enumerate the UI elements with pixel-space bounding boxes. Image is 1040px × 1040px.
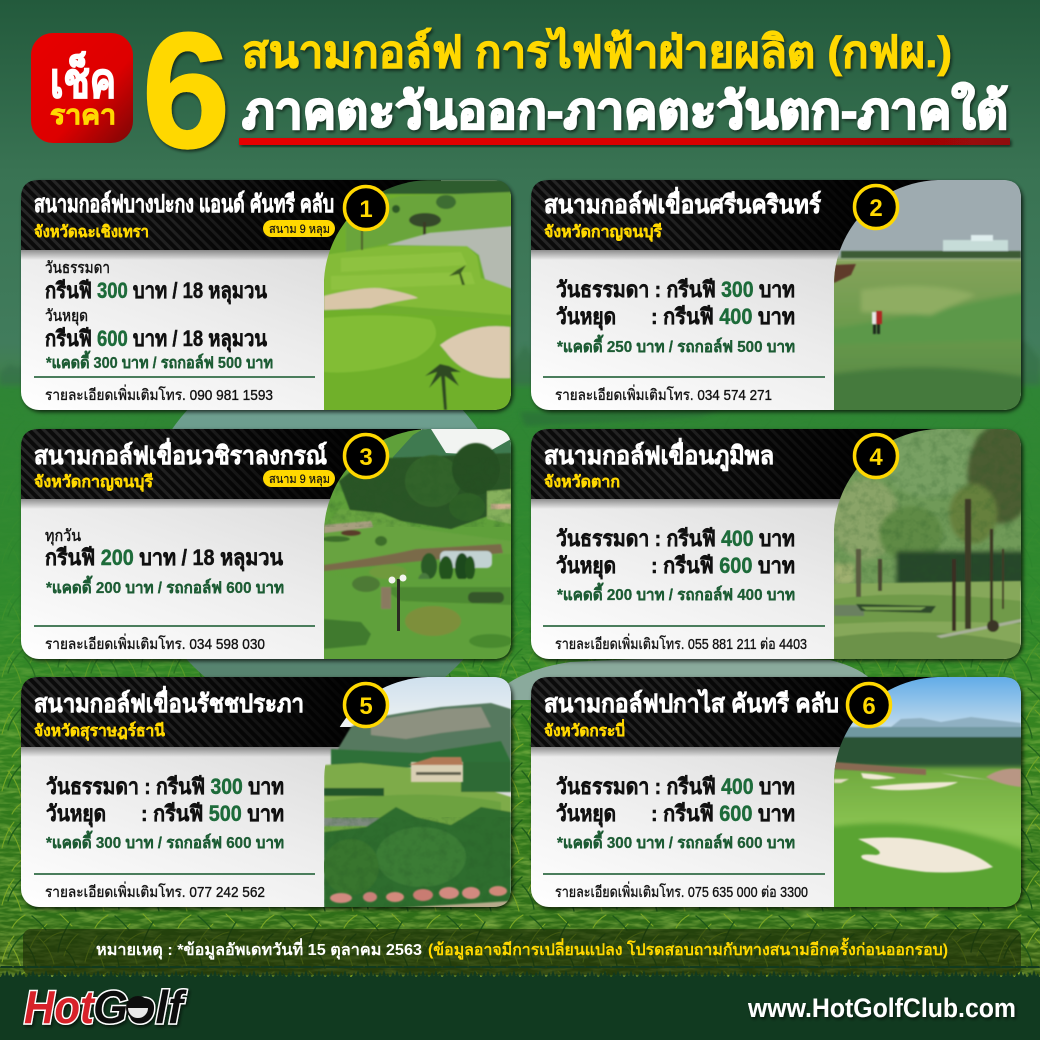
- badge: check price: เช็ค: [50, 51, 116, 108]
- course 1 prices: [45, 260, 273, 372]
- course 5 prices: *แคดดี้ 300 บาท / รถกอล์ฟ 600 บาท: [46, 830, 284, 852]
- footer band: [0, 966, 1040, 1040]
- course 1 prices: *แคดดี้ 300 บาท / รถกอล์ฟ 500 บาท: [46, 350, 273, 372]
- logo: HotGolf: Hot: [24, 981, 96, 1033]
- course 5 prices: วันหยุด: [46, 801, 106, 828]
- remark band: [23, 929, 1021, 975]
- course 1 prices: กรีนฟี 300 บาท / 18 หลุมวน: [45, 278, 267, 305]
- panel: course 2: [531, 180, 1031, 418]
- course 2 prices: [556, 277, 795, 356]
- course 1 prices: กรีนฟี 600 บาท / 18 หลุมวน: [45, 326, 267, 353]
- course 4 prices: *แคดดี้ 200 บาท / รถกอล์ฟ 400 บาท: [557, 582, 795, 604]
- number badge 5: 5: [359, 693, 373, 720]
- course 4 prices: วันธรรมดา : กรีนฟี 400 บาท: [556, 526, 795, 551]
- logo: HotGolf: Golf: [93, 981, 188, 1033]
- course 3 prices: ทุกวัน: [45, 528, 81, 546]
- course 4 title: สนามกอล์ฟเขื่อนภูมิพล: [544, 438, 774, 472]
- photo: course 6: [834, 677, 1021, 907]
- course 3 title: สนามกอล์ฟเขื่อนวชิราลงกรณ์: [34, 438, 327, 470]
- course 1 prices: วันธรรมดา: [45, 260, 110, 277]
- course 5 prices: : กรีนฟี 500 บาท: [141, 801, 284, 826]
- photo: course 5: [321, 677, 516, 909]
- course 1 title: สนามกอล์ฟบางปะกง แอนด์ คันทรี คลับ: [34, 190, 334, 218]
- course 4 prices: : กรีนฟี 600 บาท: [651, 553, 795, 578]
- course 4 prices: วันหยุด: [556, 553, 616, 580]
- course 3 prices: [45, 528, 284, 597]
- course 2 prices: วันธรรมดา : กรีนฟี 300 บาท: [556, 277, 795, 302]
- course 1 contact: รายละเอียดเพิ่มเติมโทร. 090 981 1593: [45, 384, 273, 404]
- course 5 contact: รายละเอียดเพิ่มเติมโทร. 077 242 562: [45, 881, 265, 901]
- heading line 1: สนามกอล์ฟ การไฟฟ้าฝ่ายผลิต (กฟผ.): [242, 26, 952, 77]
- course 5 province: จังหวัดสุราษฎร์ธานี: [34, 721, 165, 741]
- background golf ball left: [139, 349, 511, 721]
- heading line 2: ภาคตะวันออก-ภาคตะวันตก-ภาคใต้: [242, 82, 1008, 139]
- course 2 prices: *แคดดี้ 250 บาท / รถกอล์ฟ 500 บาท: [557, 334, 795, 356]
- pill: 9 holes: สนาม 9 หลุม: [269, 222, 330, 237]
- photo: course 4: [834, 429, 1021, 659]
- course 3 province: จังหวัดกาญจนบุรี: [34, 472, 153, 492]
- photo: course 2: [834, 180, 1021, 410]
- course 6 prices: วันหยุด: [556, 801, 616, 828]
- number badge 5: [344, 684, 388, 726]
- number badge 6: [848, 684, 890, 726]
- panel: course 4: [531, 421, 1035, 661]
- course 4 province: จังหวัดตาก: [544, 473, 620, 491]
- course 6 prices: [556, 774, 795, 852]
- red underline bar: [239, 138, 1010, 145]
- number badge 1: [344, 186, 388, 230]
- number badge 2: [854, 186, 898, 228]
- number badge 1: 1: [359, 196, 373, 223]
- number badge 3: [344, 434, 388, 478]
- course 1 prices: วันหยุด: [45, 308, 88, 326]
- course 6 contact: รายละเอียดเพิ่มเติมโทร. 075 635 000 ต่อ 3300: [555, 881, 808, 901]
- course 6 prices: : กรีนฟี 600 บาท: [651, 801, 795, 826]
- title block: [31, 0, 1010, 182]
- panel: course 1: [21, 180, 516, 412]
- course 2 prices: : กรีนฟี 400 บาท: [651, 304, 795, 329]
- course 3 prices: *แคดดี้ 200 บาท / รถกอล์ฟ 600 บาท: [46, 575, 284, 597]
- course 1 province: จังหวัดฉะเชิงเทรา: [34, 223, 149, 241]
- course 2 province: จังหวัดกาญจนบุรี: [544, 222, 662, 242]
- course 3 contact: รายละเอียดเพิ่มเติมโทร. 034 598 030: [45, 633, 265, 653]
- remark band: (ข้อมูลอาจมีการเปลี่ยนแปลง โปรดสอบถามกับทางสนามอีกครั้งก่อนออกรอบ): [428, 937, 948, 961]
- panel: course 3: [21, 429, 516, 661]
- panel: course 5: [21, 677, 516, 909]
- background golf ball right: [505, 658, 873, 700]
- course 5 prices: วันธรรมดา : กรีนฟี 300 บาท: [46, 774, 284, 799]
- course 6 province: จังหวัดกระบี่: [544, 719, 625, 740]
- photo: course 3: [321, 429, 516, 661]
- course 5 prices: [46, 774, 284, 852]
- course 2 title: สนามกอล์ฟเขื่อนศรีนครินทร์: [544, 187, 822, 219]
- badge: check price: [31, 33, 133, 143]
- logo: HotGolf: [24, 981, 188, 1033]
- panel: course 6: [531, 677, 1031, 915]
- number badge 3: 3: [359, 444, 373, 471]
- website url: www.HotGolfClub.com: [747, 993, 1016, 1023]
- remark band: หมายเหตุ : *ข้อมูลอัพเดทวันที่ 15 ตุลาคม 2563: [96, 938, 422, 961]
- photo: course 1: [321, 180, 516, 412]
- number badge 4: 4: [869, 444, 883, 471]
- course 2 prices: วันหยุด: [556, 304, 616, 331]
- course 2 contact: รายละเอียดเพิ่มเติมโทร. 034 574 271: [555, 384, 772, 404]
- number badge 4: [854, 434, 898, 478]
- course 6 title: สนามกอล์ฟปกาไส คันทรี คลับ: [544, 688, 839, 718]
- number badge 2: 2: [869, 195, 883, 222]
- course 4 prices: [556, 526, 795, 604]
- course 5 title: สนามกอล์ฟเขื่อนรัชชประภา: [34, 686, 304, 718]
- badge: check price: ราคา: [50, 100, 116, 130]
- number badge 6: 6: [862, 693, 876, 720]
- pill: 9 holes: สนาม 9 หลุม: [269, 472, 330, 487]
- course 6 prices: *แคดดี้ 300 บาท / รถกอล์ฟ 600 บาท: [557, 830, 795, 852]
- course 4 contact: รายละเอียดเพิ่มเติมโทร. 055 881 211 ต่อ 4403: [555, 633, 807, 653]
- course 3 prices: กรีนฟี 200 บาท / 18 หลุมวน: [45, 545, 283, 572]
- course 6 prices: วันธรรมดา : กรีนฟี 400 บาท: [556, 774, 795, 799]
- big number 6: 6: [142, 0, 230, 182]
